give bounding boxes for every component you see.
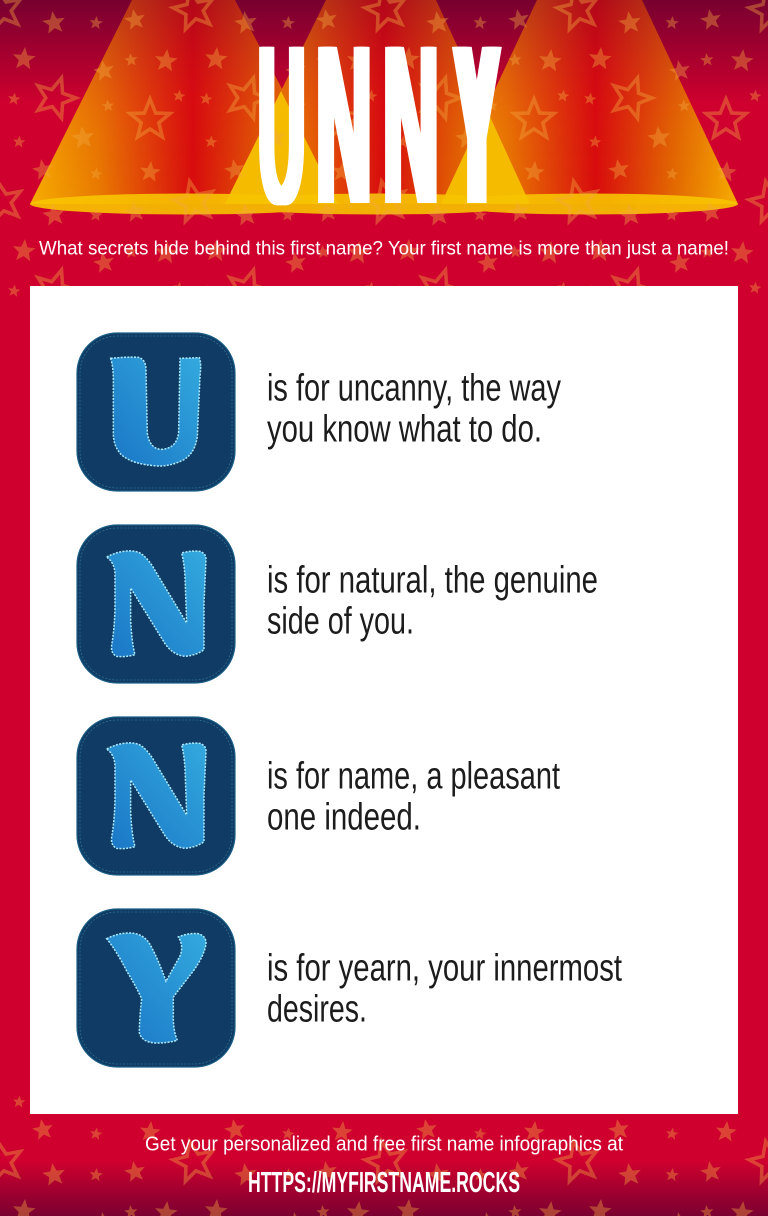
icon: letter N xyxy=(77,525,235,683)
star pattern: header xyxy=(0,0,768,300)
text: Y: desires. xyxy=(267,989,367,1031)
title: Y xyxy=(456,0,498,252)
star pattern: footer xyxy=(0,1114,768,1216)
title: N xyxy=(383,0,439,252)
text: U xyxy=(267,368,561,451)
text: N natural: is for natural, the genuine xyxy=(267,560,598,602)
text: N name: one indeed. xyxy=(267,797,421,839)
spotlights xyxy=(30,0,738,204)
text: U: is for uncanny, the way xyxy=(267,368,561,410)
icon: letter Y xyxy=(77,909,235,1067)
icon: letter U xyxy=(77,333,235,491)
title xyxy=(259,0,502,252)
footer line: Get your personalized and free first name infographics at xyxy=(145,1134,623,1156)
star pattern: left strip above footer xyxy=(0,1090,30,1114)
text: Y: is for yearn, your innermost xyxy=(267,948,622,990)
text: N name xyxy=(267,756,560,839)
spotlight floor ellipses xyxy=(30,194,738,214)
text: Y xyxy=(267,948,622,1031)
footer url: HTTPS://MYFIRSTNAME.ROCKS xyxy=(248,1167,520,1199)
subtitle: What secrets hide behind this first name? Your first name is more than just a name! xyxy=(39,238,729,260)
text: U: you know what to do. xyxy=(267,409,542,451)
text: N natural xyxy=(267,560,598,643)
title: U xyxy=(259,0,305,252)
text: N natural: side of you. xyxy=(267,601,414,643)
icon: letter N xyxy=(77,717,235,875)
text: N name: is for name, a pleasant xyxy=(267,756,560,798)
title: N xyxy=(316,0,372,252)
spotlight overlaps xyxy=(225,91,530,204)
white panel xyxy=(30,286,738,1114)
